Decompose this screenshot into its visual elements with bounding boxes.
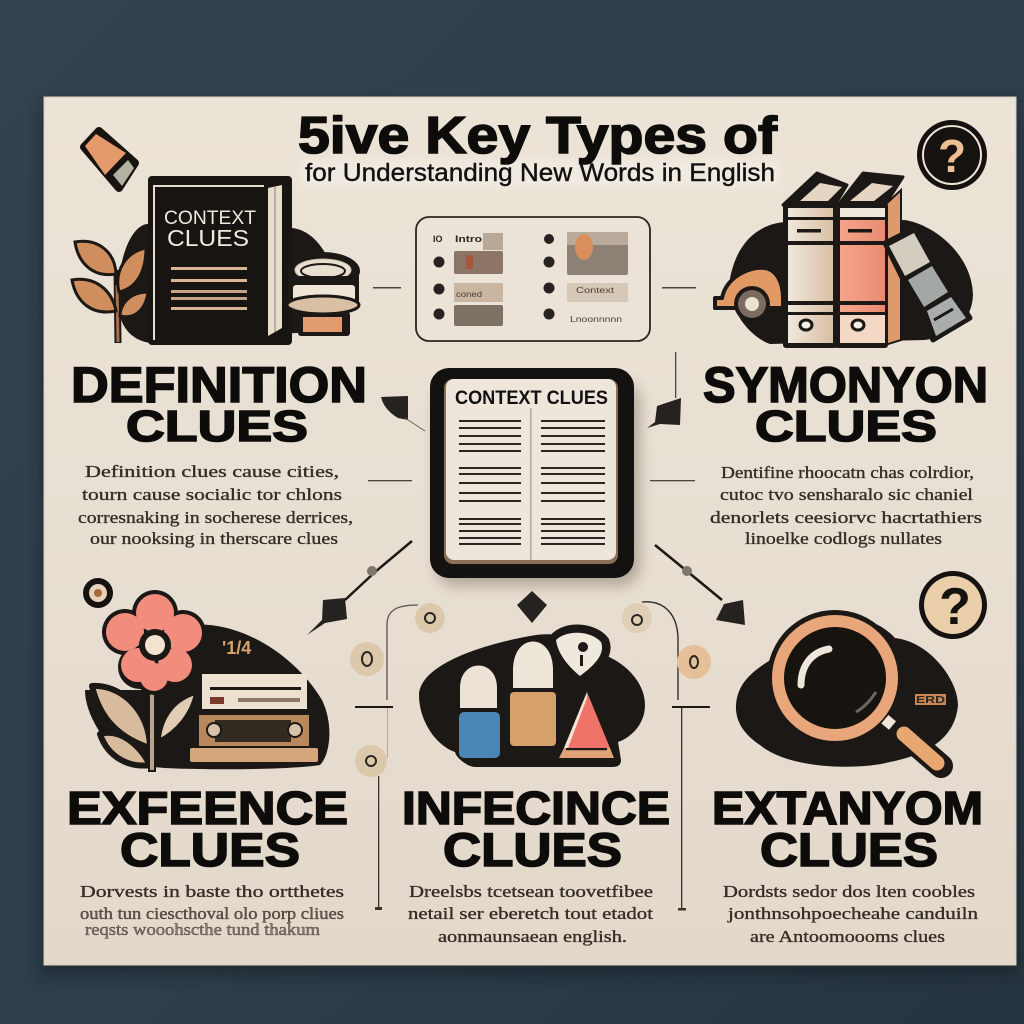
icon: question mark top right: ? bbox=[938, 130, 966, 182]
speech bubble bbox=[553, 628, 608, 678]
text block: inference description: Dreelsbs tcetsean toovetfibee bbox=[409, 882, 653, 901]
arrow: upper right pointer bbox=[647, 398, 681, 428]
arrow: lower right pointer bbox=[655, 545, 745, 625]
text block: exfeence description: Dorvests in baste tho ortthetes bbox=[80, 882, 344, 901]
icon: flower and stacked books cluster bbox=[85, 590, 329, 772]
dark blob bbox=[419, 634, 645, 767]
car bbox=[715, 268, 783, 322]
text block: inference description: netail ser eberetch tout etadot bbox=[408, 904, 653, 923]
text block: synonym description: Dentifine rhoocatn chas colrdior, bbox=[721, 463, 974, 482]
lens bbox=[767, 610, 903, 746]
text block: definition description: tourn cause socialic tor chlons bbox=[82, 485, 342, 504]
blue pill bbox=[459, 666, 500, 758]
panel: bullet list card: Context bbox=[576, 286, 615, 295]
tokens and connectors left bbox=[350, 603, 445, 777]
connector: right of centre book bbox=[650, 480, 695, 481]
book heading: CONTEXT CLUES bbox=[455, 388, 608, 409]
tokens and connectors right bbox=[622, 602, 711, 910]
panel: bullet list card: IO bbox=[433, 234, 443, 244]
heading: extanyom clues: CLUES bbox=[760, 823, 938, 876]
heading: main title: 5ive Key Types of bbox=[298, 107, 778, 165]
tilted grey book bbox=[885, 228, 970, 340]
cover title: CONTEXT bbox=[164, 208, 256, 229]
heading: synonym clues: SYMONYON bbox=[703, 357, 988, 413]
text block: definition description bbox=[78, 462, 353, 548]
dark blob bbox=[118, 224, 340, 343]
heading: exfeence clues: CLUES bbox=[120, 823, 300, 876]
title bbox=[298, 107, 780, 188]
text block: definition description: our nooksing in therscare clues bbox=[90, 529, 338, 548]
text block: inference description: aonmaunsaean english. bbox=[438, 927, 627, 946]
text block: synonym description: cutoc tvo sensharalo sic chaniel bbox=[720, 485, 973, 504]
arrow: upper left pointer bbox=[381, 396, 425, 431]
dark blob bbox=[730, 220, 973, 344]
text block: inference description bbox=[408, 882, 653, 946]
panel: bullet list card: Lnoonnnnn bbox=[570, 315, 622, 324]
arrow: lower left pointer bbox=[307, 541, 412, 635]
panel: bullet list card: Intro bbox=[455, 234, 483, 244]
dark blob bbox=[85, 625, 329, 769]
heading: inference clues bbox=[402, 782, 670, 876]
red triangle bbox=[559, 692, 614, 758]
text block: exfeence description bbox=[80, 882, 344, 939]
heading: subtitle: for Understanding New Words in English bbox=[305, 159, 775, 187]
tan pill bbox=[510, 642, 556, 746]
text block: extanyom description: Dordsts sedor dos lten coobles bbox=[723, 882, 975, 901]
text block: synonym description: linoelke codlogs nullates bbox=[745, 529, 942, 548]
icon: books cluster bbox=[715, 173, 973, 348]
icon: eraser bbox=[84, 131, 135, 188]
text block: definition description: Definition clues cause cities, bbox=[85, 462, 339, 481]
gold marks: '1/4 bbox=[222, 638, 251, 658]
plant bbox=[72, 241, 148, 343]
heading: definition clues bbox=[71, 357, 367, 451]
icon: question mark lower right bbox=[919, 571, 987, 639]
icon: centre open book bbox=[430, 368, 640, 586]
handle bbox=[903, 733, 941, 766]
right page lines bbox=[541, 420, 605, 545]
connector: vertical upper right bbox=[675, 352, 676, 398]
heading: extanyom clues bbox=[712, 782, 983, 876]
icon: magnifying glass cluster bbox=[736, 610, 958, 767]
neck bbox=[881, 715, 896, 730]
book left bbox=[783, 173, 847, 348]
icon: context clues book cluster bbox=[72, 176, 360, 345]
icon: magnifying glass cluster: ERD bbox=[916, 695, 945, 706]
vertical divider between exfeence and inference bbox=[375, 776, 382, 910]
text block: exfeence description: outh tun ciescthoval olo porp cliues bbox=[80, 904, 344, 923]
label bbox=[915, 694, 946, 705]
book right bbox=[835, 173, 903, 348]
panel: bullet list card: coned bbox=[456, 290, 482, 299]
icon: small coin top of flower bbox=[83, 578, 113, 608]
heading: definition clues: CLUES bbox=[126, 402, 308, 451]
dark blob bbox=[736, 619, 958, 767]
icon: question mark lower right: ? bbox=[939, 578, 971, 636]
leaves bbox=[92, 686, 197, 772]
panel: bullet list card bbox=[416, 217, 650, 341]
books bbox=[190, 674, 318, 762]
heading: exfeence clues bbox=[67, 782, 348, 876]
connector: right of list bbox=[662, 287, 696, 288]
text block: exfeence description: reqsts wooohscthe tund thakum bbox=[85, 920, 320, 939]
heading: synonym clues: CLUES bbox=[755, 402, 937, 451]
icon: shapes cluster bbox=[419, 628, 645, 767]
heading: inference clues: CLUES bbox=[443, 823, 622, 876]
heading: extanyom clues: EXTANYOM bbox=[712, 782, 983, 834]
text block: extanyom description: jonthnsohpoecheahe canduiln bbox=[727, 904, 979, 923]
heading: synonym clues bbox=[703, 357, 988, 451]
heading: exfeence clues: EXFEENCE bbox=[67, 782, 348, 834]
book cover bbox=[148, 176, 292, 345]
connector: left of centre book bbox=[368, 480, 412, 481]
arrow: centre pointer bbox=[517, 591, 547, 623]
heading: inference clues: INFECINCE bbox=[402, 782, 670, 834]
text block: extanyom description: are Antoomoooms clues bbox=[750, 927, 945, 946]
icon: question mark top right bbox=[917, 120, 987, 190]
text block: extanyom description bbox=[723, 882, 979, 946]
flower bbox=[102, 590, 206, 695]
text block: synonym description: denorlets ceesiorvc hacrtathiers bbox=[710, 508, 982, 527]
connector: left of list bbox=[373, 287, 401, 288]
left page lines bbox=[459, 420, 521, 545]
text block: definition description: corresnaking in socherese derrices, bbox=[78, 508, 353, 527]
cup bbox=[286, 252, 360, 336]
text block: synonym description bbox=[710, 463, 982, 548]
heading: definition clues: DEFINITION bbox=[71, 357, 367, 413]
book cover: CLUES bbox=[167, 225, 249, 251]
